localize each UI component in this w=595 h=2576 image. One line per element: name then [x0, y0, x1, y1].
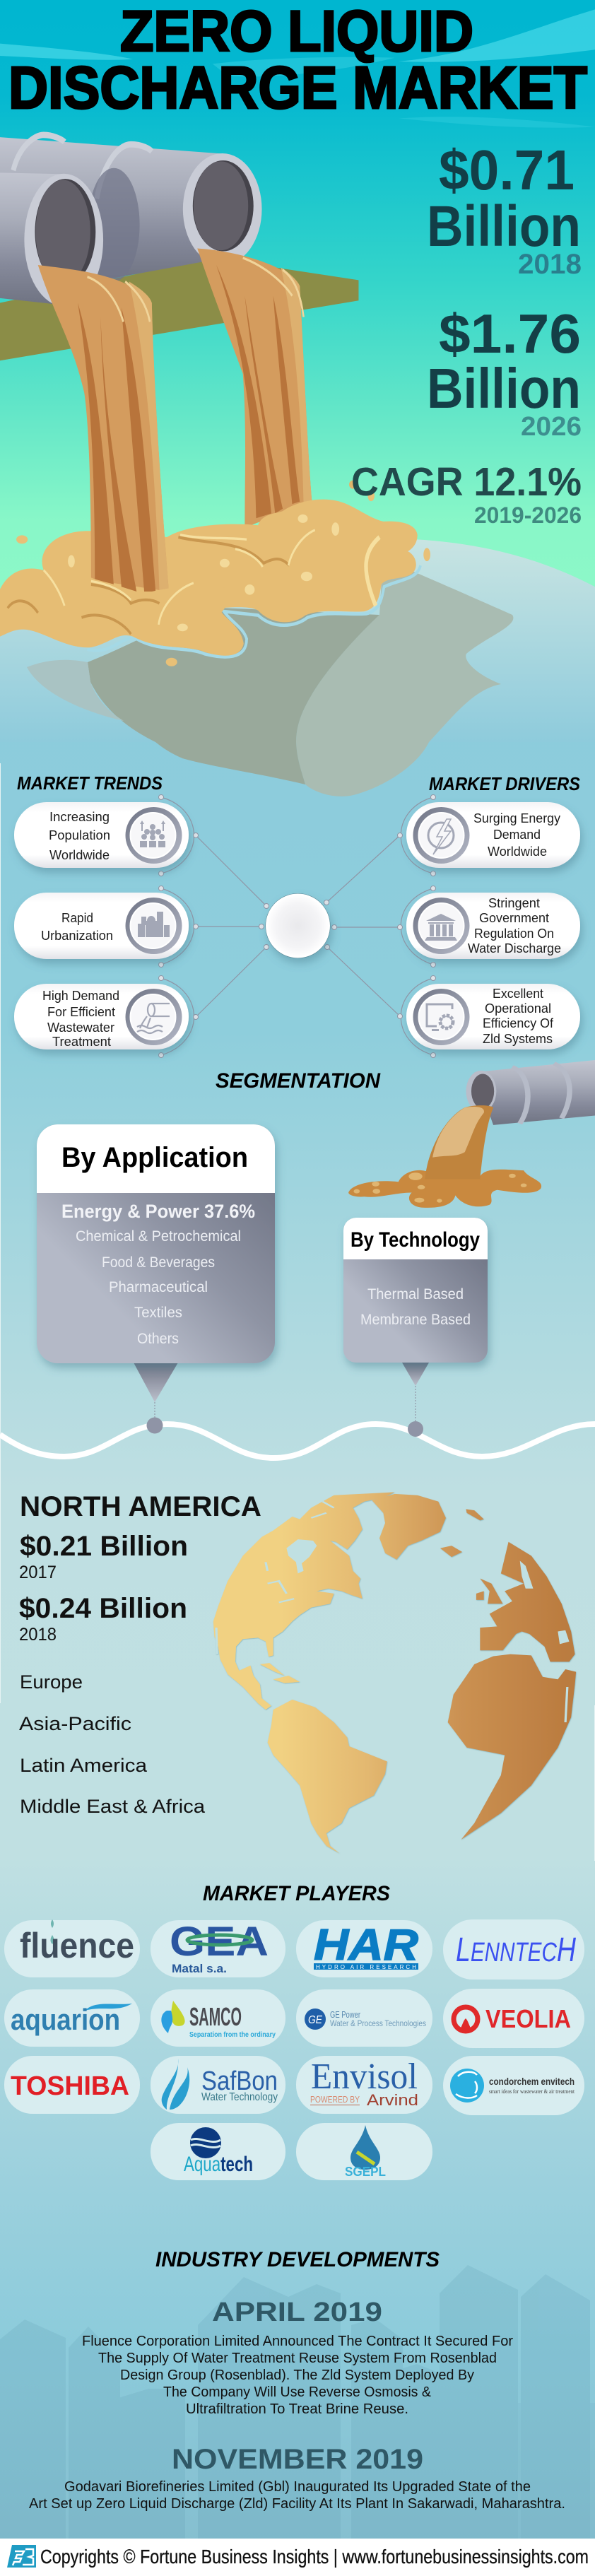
- front pipe: [0, 172, 103, 306]
- driver: government regulation: Government: [479, 911, 549, 925]
- market size statistics: $1.76: [439, 302, 581, 365]
- market size statistics: [351, 139, 582, 528]
- logo: fluence: fluence: [20, 1926, 134, 1965]
- trend: urbanization: Rapid: [61, 911, 93, 925]
- driver: energy demand: Worldwide: [488, 845, 547, 859]
- logo: SAMCO: [151, 1989, 285, 2047]
- panel: by technology: By Technology: [350, 1228, 480, 1252]
- stain on the water: [27, 558, 513, 796]
- driver: government regulation: Water Discharge: [468, 941, 561, 955]
- logo: GE Power: [296, 1989, 432, 2047]
- decorative wave line: [0, 1424, 595, 1458]
- development: November 2019: NOVEMBER 2019: [172, 2444, 423, 2475]
- market size statistics: 2026: [521, 412, 582, 442]
- logo: GEA Matal: Matal s.a.: [172, 1962, 227, 1975]
- development: April 2019: APRIL 2019: [212, 2298, 382, 2327]
- logo: Lenntech: [443, 1919, 584, 1980]
- heading: market trends: MARKET TRENDS: [17, 772, 163, 794]
- regional figures: Latin America: [20, 1755, 148, 1776]
- logo: Hydro Air Research: [296, 1920, 432, 1977]
- heading: segmentation: SEGMENTATION: [216, 1069, 381, 1093]
- logo: SafBon: SafBon: [201, 2066, 278, 2096]
- development: April 2019: Fluence Corporation Limited Announced The Contract It Secured For: [82, 2334, 513, 2349]
- trend: urbanization: [14, 893, 189, 959]
- logo: condorchem envitech: condorchem envitech: [489, 2076, 575, 2087]
- illustration: pipe pouring sludge: [348, 1060, 595, 1208]
- development: November 2019: [29, 2444, 565, 2512]
- regional figures: 2018: [19, 1625, 57, 1645]
- right sludge stream: [197, 249, 312, 528]
- regional figures: Middle East & Africa: [20, 1796, 206, 1817]
- market size statistics: CAGR 12.1%: [351, 459, 582, 505]
- trend: wastewater treatment: High Demand: [42, 989, 119, 1003]
- panel: by technology: [343, 1218, 488, 1437]
- logo: SGEPL: SGEPL: [345, 2165, 386, 2179]
- regional figures: NORTH AMERICA: [20, 1491, 261, 1522]
- heading: industry developments: INDUSTRY DEVELOPMENTS: [155, 2248, 440, 2271]
- logo: Veolia: [443, 1989, 584, 2048]
- logo: Toshiba: [4, 2056, 140, 2114]
- hero illustration: pipes discharging sludge: [0, 9, 595, 796]
- driver: operational efficiency: Zld Systems: [483, 1032, 553, 1046]
- market size statistics: 2018: [518, 249, 582, 280]
- logo: Lenntech: LENNTECH: [456, 1931, 576, 1969]
- connector hub: [158, 794, 435, 1057]
- trend: population: Worldwide: [49, 848, 110, 862]
- background skyline: [0, 2265, 595, 2539]
- driver: operational efficiency: Efficiency Of: [483, 1016, 554, 1030]
- logo: Aquatech: [151, 2123, 285, 2180]
- market size statistics: Billion: [427, 357, 581, 420]
- market size statistics: $0.71: [439, 139, 575, 201]
- logo: SafBon: Water Technology: [201, 2091, 278, 2103]
- logo: GE Power: GE Power: [330, 2009, 360, 2020]
- logo: fluence: [4, 1919, 140, 1977]
- regional figures: $0.24 Billion: [19, 1593, 187, 1624]
- regional figures: $0.21 Billion: [20, 1531, 188, 1562]
- icon: government building: [425, 914, 457, 941]
- logo: aquarion: [4, 1989, 140, 2047]
- development: April 2019: Ultrafiltration To Treat Brine Reuse.: [186, 2401, 408, 2417]
- driver: operational efficiency: [406, 984, 580, 1049]
- logo: GEA Matal: GEA: [170, 1919, 269, 1965]
- trend: urbanization: Urbanization: [41, 929, 113, 943]
- logo: GEA Matal: [151, 1919, 285, 1977]
- logo: Envisol: [296, 2056, 432, 2114]
- driver: energy demand: [406, 802, 580, 868]
- icon: pipe and waves: [137, 1004, 170, 1033]
- regional figures: [19, 1491, 261, 1817]
- regional figures: 2017: [19, 1563, 57, 1582]
- development: April 2019: The Company Will Use Reverse Osmosis &: [163, 2384, 432, 2400]
- icon: Fortune Business Insights logo: [7, 2545, 36, 2568]
- panel: by application: Food & Beverages: [102, 1254, 215, 1271]
- heading: market players: MARKET PLAYERS: [203, 1882, 390, 1905]
- icon: crowd growth: [140, 821, 165, 847]
- logo: Veolia: VEOLIA: [485, 2004, 571, 2033]
- heading: market drivers: MARKET DRIVERS: [429, 773, 581, 794]
- trend: wastewater treatment: Wastewater: [47, 1021, 114, 1035]
- driver: energy demand: Surging Energy: [473, 811, 560, 825]
- trend: population: [14, 802, 189, 868]
- driver: government regulation: [406, 893, 580, 959]
- title: ZERO LIQUID: [120, 0, 473, 64]
- panel: by application: Others: [137, 1331, 179, 1347]
- market size statistics: 2019-2026: [474, 502, 582, 528]
- logo: GE Power: GE: [308, 2014, 322, 2026]
- panel: by technology: Thermal Based: [367, 1286, 464, 1302]
- world map globe: [213, 1492, 576, 1854]
- development: April 2019: [82, 2298, 513, 2417]
- development: April 2019: Design Group (Rosenblad). The Zld System Deployed By: [120, 2368, 474, 2383]
- back pipe: [0, 135, 262, 281]
- logo: Envisol: POWERED BY: [310, 2094, 360, 2105]
- logo: Hydro Air Research: HYDRO AIR RESEARCH: [316, 1964, 416, 1970]
- panel: by application: By Application: [61, 1142, 248, 1173]
- logo: SAMCO: Separation from the ordinary: [189, 2031, 276, 2039]
- driver: operational efficiency: Operational: [485, 1001, 551, 1016]
- logo: SAMCO: SAMCO: [189, 2002, 242, 2031]
- footer bar: [0, 2539, 595, 2576]
- logo: Envisol: Arvind: [367, 2091, 418, 2109]
- development: November 2019: Art Set up Zero Liquid Discharge (Zld) Facility At Its Plant In Sakarwadi, Maharashtra.: [29, 2496, 565, 2512]
- trend: wastewater treatment: Treatment: [52, 1035, 111, 1049]
- sludge pool: [0, 500, 420, 657]
- regional figures: Europe: [20, 1671, 83, 1693]
- panel: by application: Textiles: [134, 1305, 182, 1321]
- driver: energy demand: Demand: [493, 828, 541, 842]
- logo: Envisol: Envisol: [311, 2057, 418, 2097]
- title: [8, 0, 587, 121]
- driver: operational efficiency: Excellent: [493, 987, 543, 1001]
- regional figures: Asia-Pacific: [19, 1713, 131, 1734]
- trend: population: Increasing: [49, 810, 110, 824]
- logo: SafBon: [151, 2056, 285, 2114]
- trend: population: Population: [49, 828, 110, 842]
- icon: monitor and gear: [427, 1004, 453, 1031]
- left sludge stream: [38, 265, 169, 592]
- driver: government regulation: Regulation On: [474, 927, 554, 941]
- panel: by application: Energy & Power 37.6%: [61, 1201, 255, 1222]
- trend: wastewater treatment: For Efficient: [47, 1005, 115, 1019]
- logo: Hydro Air Research: HAR: [314, 1921, 418, 1970]
- driver: government regulation: Stringent: [488, 896, 540, 910]
- panel: by technology: Membrane Based: [360, 1312, 471, 1328]
- logo: SGEPL: [296, 2123, 432, 2180]
- logo: condorchem envitech: [443, 2056, 584, 2115]
- plank: [0, 258, 358, 360]
- panel: by application: [37, 1124, 275, 1433]
- logo: GE Power: Water & Process Technologies: [330, 2018, 426, 2028]
- icon: city: [138, 912, 170, 937]
- logo: Aquatech: Aquatech: [184, 2153, 253, 2176]
- icon: lightning: [428, 819, 454, 854]
- development: November 2019: Godavari Biorefineries Limited (Gbl) Inaugurated Its Upgraded State of the: [64, 2479, 531, 2495]
- logo: Toshiba: TOSHIBA: [11, 2071, 129, 2101]
- logo: aquarion: aquarion: [11, 2003, 120, 2036]
- logo grid: market players: [4, 1919, 584, 2180]
- panel: by application: Pharmaceutical: [109, 1279, 208, 1295]
- trend: wastewater treatment: [14, 984, 189, 1049]
- development: April 2019: The Supply Of Water Treatment Reuse System From Rosenblad: [98, 2351, 497, 2366]
- logo: condorchem envitech: smart ideas for wastewater & air treatment: [489, 2088, 575, 2095]
- panel: by application: Chemical & Petrochemical: [76, 1228, 241, 1245]
- foam in front of stream, highlights and droplets: [8, 481, 430, 666]
